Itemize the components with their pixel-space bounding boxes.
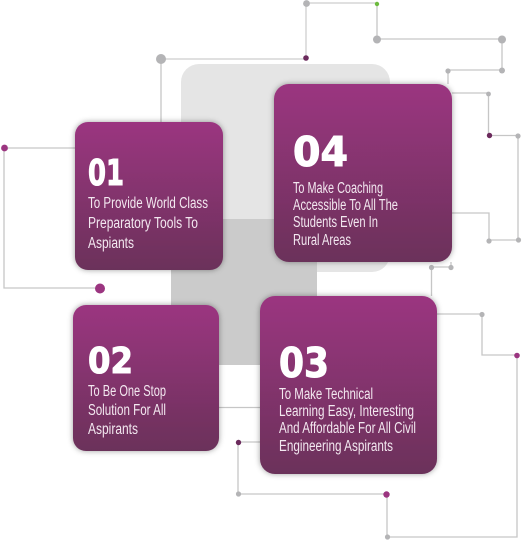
text: card 01: To Provide World Class	[88, 195, 208, 212]
background panel: light grey	[181, 64, 390, 272]
text: card 04: Accessible To All The	[293, 197, 398, 214]
panel: card 03	[260, 296, 437, 474]
text: card 01: Preparatory Tools To	[88, 215, 198, 232]
panel: card 02	[73, 305, 219, 451]
text: card 04	[293, 180, 398, 249]
text: card 03: To Make Technical	[279, 386, 373, 403]
text: card 02: Solution For All	[88, 402, 166, 419]
number 03: 03	[279, 339, 329, 387]
text: card 02: To Be One Stop	[88, 383, 166, 400]
text: card 01: Aspiants	[88, 235, 134, 252]
number 01: 01	[88, 153, 124, 194]
text: card 03	[279, 386, 416, 455]
background panel: dark grey	[171, 219, 317, 365]
text: card 04: To Make Coaching	[293, 180, 383, 197]
connector network: left	[1, 145, 105, 294]
number 02: 02	[88, 341, 133, 382]
connector network: lower right	[236, 262, 520, 540]
panel: card 01	[75, 122, 223, 270]
number 04: 04	[293, 128, 348, 176]
text: card 03: And Affordable For All Civil	[279, 420, 416, 437]
text: card 01	[88, 195, 208, 252]
connector: card 2 to card 3	[219, 406, 260, 408]
text: card 04: Students Even In	[293, 214, 378, 231]
text: card 02: Aspirants	[88, 421, 138, 438]
text: card 03: Engineering Aspirants	[279, 438, 393, 455]
text: card 03: Learning Easy, Interesting	[279, 403, 414, 420]
connector network: top	[156, 0, 506, 122]
text: card 02	[88, 383, 166, 438]
panel: card 04	[274, 84, 452, 262]
connector network: right	[452, 92, 521, 244]
text: card 04: Rural Areas	[293, 232, 351, 249]
